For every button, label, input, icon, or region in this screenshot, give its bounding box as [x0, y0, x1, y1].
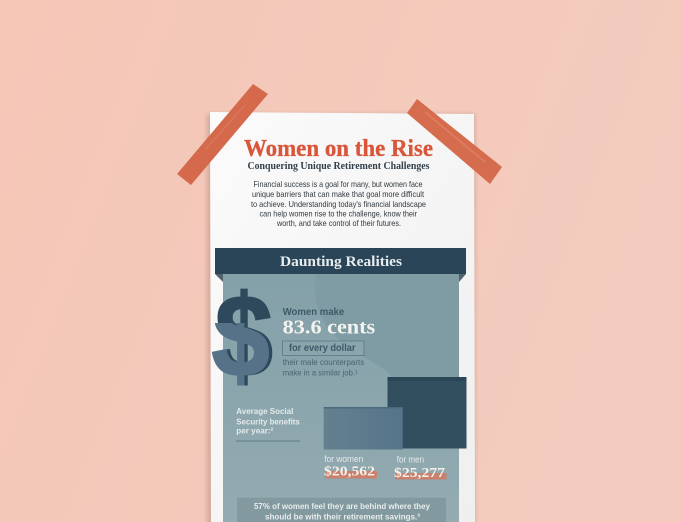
intro paragraph: unique barriers that can make that goal more difficult	[252, 189, 425, 199]
wage gap text	[282, 307, 375, 377]
label: men value: for men	[397, 454, 424, 464]
callout: retirement savings: 57% of women feel they are behind where they	[254, 501, 430, 511]
social security label: per year:²	[236, 426, 274, 436]
callout: retirement savings	[237, 498, 446, 522]
paper sheet	[210, 112, 475, 522]
bar chart: social security benefits	[324, 377, 466, 450]
callout: for every dollar: for every dollar	[289, 343, 356, 354]
paper shadow	[207, 114, 475, 522]
label: men value: $25,277	[394, 465, 445, 480]
intro paragraph: to achieve. Understanding today's financial landscape	[251, 199, 426, 209]
social security label	[236, 406, 300, 442]
infographic poster scene	[177, 84, 502, 522]
wage gap text: their male counterparts	[283, 358, 364, 367]
right tape	[407, 99, 502, 184]
social security label: Security benefits	[236, 416, 300, 426]
panel: daunting realities	[212, 248, 466, 522]
wage gap text: Women make	[283, 307, 345, 318]
icon: dollar sign: $	[212, 272, 270, 401]
intro paragraph	[251, 179, 426, 228]
section heading: Daunting Realities	[280, 254, 402, 270]
label: women value: for women	[324, 454, 363, 464]
section heading bar	[215, 248, 466, 274]
background blob	[315, 274, 459, 377]
subtitle: Conquering Unique Retirement Challenges	[248, 161, 430, 172]
intro paragraph: worth, and take control of their futures.	[276, 218, 401, 228]
icon: dollar sign: $	[215, 272, 273, 401]
wage gap text: make in a similar job.¹	[283, 368, 358, 377]
intro paragraph: Financial success is a goal for many, but women face	[254, 179, 423, 189]
label: men value	[394, 454, 446, 480]
fold shadows	[215, 274, 223, 282]
label: women value: $20,562	[324, 464, 375, 479]
callout: retirement savings: should be with their retirement savings.³	[265, 512, 420, 522]
title: Women on the Rise	[244, 136, 433, 162]
wage gap text: 83.6 cents	[283, 316, 375, 338]
label: women value	[324, 454, 377, 479]
social security label: Average Social	[236, 406, 293, 416]
intro paragraph: can help women rise to the challenge, know their	[260, 208, 417, 218]
left tape	[177, 84, 268, 185]
